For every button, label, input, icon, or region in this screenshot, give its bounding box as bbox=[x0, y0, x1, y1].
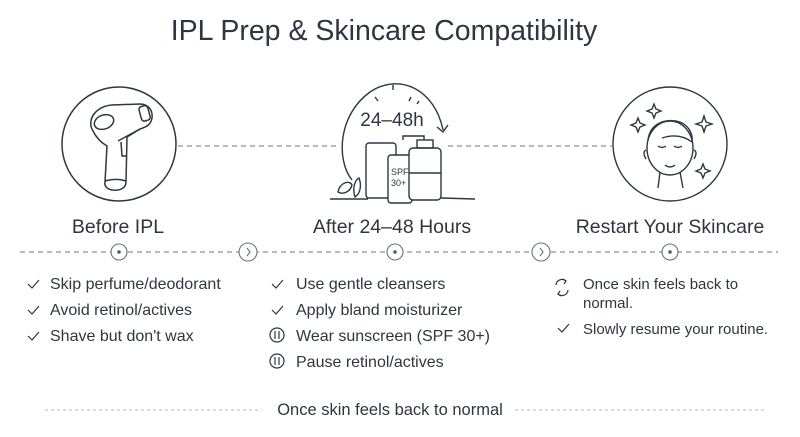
list: restart skincare bbox=[556, 276, 768, 338]
list: restart skincare: Once skin feels back to bbox=[583, 276, 738, 293]
list: restart skincare: Slowly resume your routine. bbox=[583, 321, 768, 338]
icon: clock and products bbox=[330, 84, 475, 203]
icon: face with sparkles bbox=[613, 87, 727, 201]
list: before IPL bbox=[28, 276, 221, 345]
heading: Before IPL: Before IPL bbox=[72, 216, 164, 238]
list: before IPL: Avoid retinol/actives bbox=[50, 302, 192, 319]
timeline bbox=[20, 243, 778, 261]
icon: IPL device bbox=[62, 87, 176, 201]
list: after 24-48 hours: Wear sunscreen (SPF 30+) bbox=[296, 328, 490, 345]
heading: Restart Your Skincare: Restart Your Skincare bbox=[576, 216, 764, 238]
list: before IPL: Shave but don't wax bbox=[50, 328, 194, 345]
list: after 24-48 hours: Pause retinol/actives bbox=[296, 354, 444, 371]
list: after 24-48 hours: Use gentle cleansers bbox=[296, 276, 445, 293]
icon: clock and products: 30+ bbox=[391, 178, 406, 188]
list: after 24-48 hours: Apply bland moisturizer bbox=[296, 302, 463, 319]
icon: clock and products: SPF bbox=[391, 167, 409, 177]
footer note: Once skin feels back to normal bbox=[277, 401, 503, 419]
list: restart skincare: normal. bbox=[583, 295, 633, 312]
icon: clock and products: 24–48h bbox=[360, 110, 424, 131]
list: before IPL: Skip perfume/deodorant bbox=[50, 276, 221, 293]
list: after 24-48 hours bbox=[270, 276, 490, 371]
heading: After 24-48 Hours: After 24–48 Hours bbox=[313, 216, 471, 238]
title: IPL Prep & Skincare Compatibility bbox=[171, 15, 598, 47]
